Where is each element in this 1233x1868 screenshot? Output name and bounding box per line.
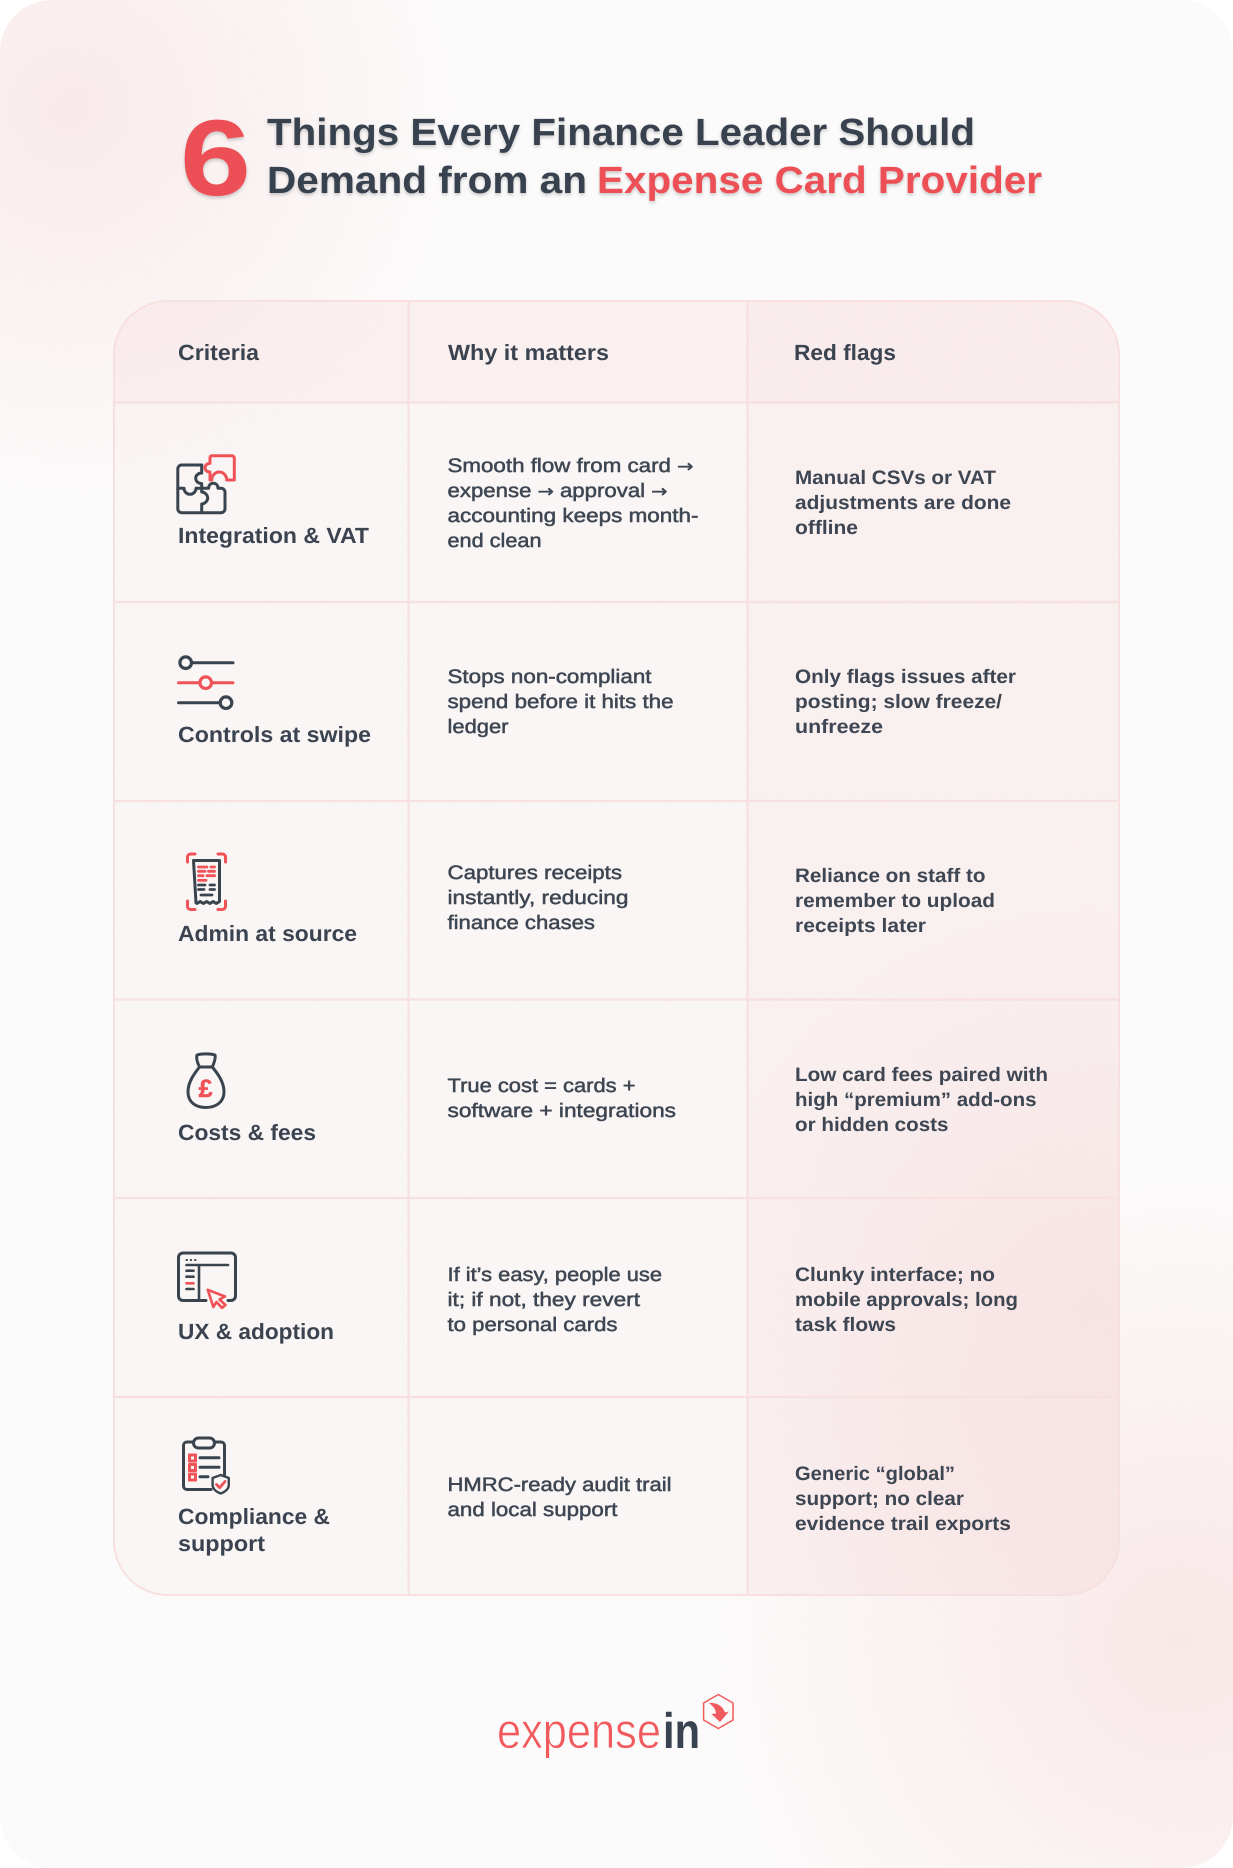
big number 6: 6 — [180, 97, 251, 218]
red flags text — [795, 1264, 1018, 1336]
why it matters text: it; if not, they revert — [448, 1289, 641, 1311]
title — [180, 97, 1042, 218]
logo wordmark: expense — [497, 1703, 661, 1759]
red flags text — [795, 1463, 1011, 1535]
red flags text — [795, 467, 1011, 539]
why it matters text: end clean — [448, 530, 542, 552]
criteria label: Compliance & — [178, 1504, 330, 1529]
why it matters text: to personal cards — [448, 1314, 618, 1336]
icon detail: pound sign: £ — [199, 1075, 213, 1103]
criteria label: UX & adoption — [178, 1319, 334, 1344]
why it matters text: Captures receipts — [448, 862, 622, 884]
table fills — [114, 301, 1119, 1595]
why it matters text: spend before it hits the — [448, 691, 674, 713]
red flags text: remember to upload — [795, 890, 995, 912]
why it matters text: ledger — [448, 716, 509, 738]
header row — [178, 340, 896, 365]
criteria label — [178, 1504, 330, 1556]
why it matters text: If it’s easy, people use — [448, 1264, 662, 1286]
why it matters text: Smooth flow from card → — [448, 455, 694, 477]
red flags text — [795, 666, 1016, 738]
red flags text: receipts later — [795, 915, 926, 937]
why it matters text: software + integrations — [448, 1100, 676, 1122]
icon: scanned receipt — [188, 854, 226, 910]
why it matters text — [448, 862, 628, 934]
logo: expensein — [497, 1694, 733, 1759]
why it matters text — [448, 1474, 672, 1521]
row: controls at swipe — [178, 657, 1016, 747]
red flags text: mobile approvals; long — [795, 1289, 1018, 1311]
why it matters text: instantly, reducing — [448, 887, 628, 909]
icon: puzzle pieces — [178, 456, 234, 513]
red flags text — [795, 865, 995, 937]
header row: Criteria — [178, 340, 260, 365]
criteria label: support — [178, 1531, 266, 1556]
why it matters text: True cost = cards + — [448, 1075, 636, 1097]
red flags text: support; no clear — [795, 1488, 964, 1510]
red flags text — [795, 1064, 1048, 1136]
red flags text: offline — [795, 517, 858, 539]
row: compliance and support — [178, 1438, 1011, 1556]
title line 2 — [267, 160, 1042, 202]
red flags text: high “premium” add-ons — [795, 1089, 1037, 1111]
red flags text: or hidden costs — [795, 1114, 949, 1136]
row: UX and adoption — [178, 1253, 1018, 1344]
comparison table — [114, 301, 1119, 1595]
red flags text: Low card fees paired with — [795, 1064, 1048, 1086]
why it matters text — [448, 1075, 676, 1122]
row: admin at source — [178, 854, 995, 946]
icon: window with cursor — [178, 1253, 236, 1308]
icon: money bag — [188, 1054, 224, 1108]
why it matters text: expense → approval → — [448, 480, 668, 502]
why it matters text — [448, 666, 674, 738]
icon: clipboard with shield — [184, 1438, 229, 1494]
row: costs and fees — [178, 1054, 1048, 1145]
red flags text: Clunky interface; no — [795, 1264, 995, 1286]
icon: sliders — [178, 657, 233, 708]
red flags text: adjustments are done — [795, 492, 1011, 514]
title line 2: Expense Card Provider — [597, 160, 1042, 202]
title line 2: Demand from an — [267, 160, 587, 202]
header row: Red flags — [794, 340, 896, 365]
red flags text: posting; slow freeze/ — [795, 691, 1003, 713]
red flags text: Generic “global” — [795, 1463, 955, 1485]
row: integration and VAT — [178, 455, 1011, 552]
criteria label: Admin at source — [178, 921, 357, 946]
title line 1: Things Every Finance Leader Should — [267, 112, 975, 154]
red flags text: Reliance on staff to — [795, 865, 986, 887]
why it matters text: Stops non-compliant — [448, 666, 652, 688]
criteria label: Integration & VAT — [178, 523, 370, 548]
header row: Why it matters — [448, 340, 609, 365]
red flags text: task flows — [795, 1314, 896, 1336]
red flags text: Manual CSVs or VAT — [795, 467, 996, 489]
why it matters text — [448, 455, 698, 552]
why it matters text: and local support — [448, 1499, 618, 1521]
red flags text: evidence trail exports — [795, 1513, 1011, 1535]
red flags text: Only flags issues after — [795, 666, 1016, 688]
why it matters text — [448, 1264, 662, 1336]
why it matters text: finance chases — [448, 912, 595, 934]
logo wordmark: in — [663, 1703, 700, 1759]
criteria label: Controls at swipe — [178, 722, 371, 747]
criteria label: Costs & fees — [178, 1120, 316, 1145]
logo hexagon icon — [704, 1694, 733, 1728]
red flags text: unfreeze — [795, 716, 883, 738]
why it matters text: accounting keeps month- — [448, 505, 698, 527]
why it matters text: HMRC-ready audit trail — [448, 1474, 672, 1496]
